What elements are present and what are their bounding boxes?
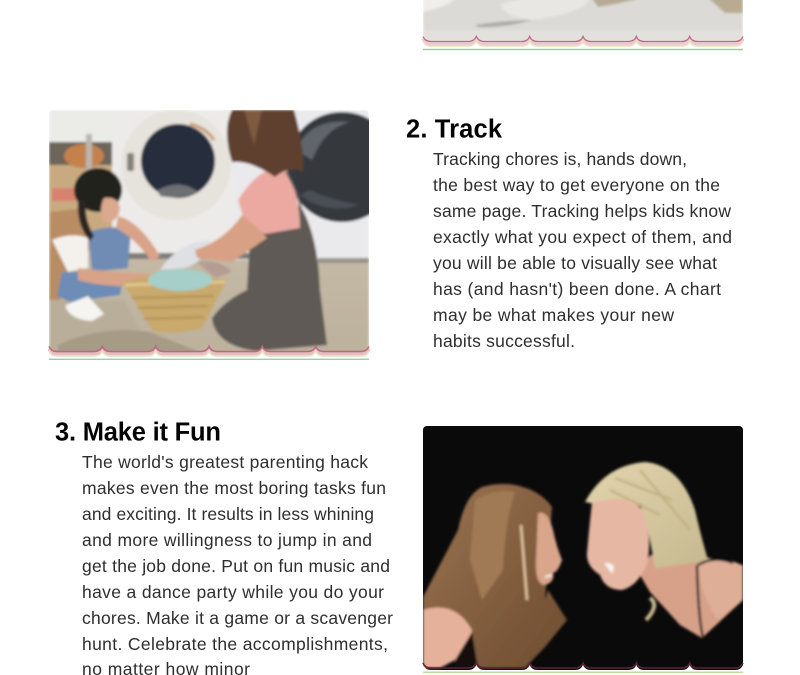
- photo: bedding on a bright floor, cropped at the top: [422, 0, 744, 50]
- text block: Track description: you will be able to visually see what: [433, 253, 717, 273]
- figure: girl: [49, 168, 160, 321]
- text block: Make it Fun description: hunt. Celebrate the accomplishments,: [82, 634, 388, 654]
- text block: Track description: may be what makes your new: [433, 305, 674, 325]
- photo edge: scalloped trim: [49, 346, 369, 370]
- photo: mother and daughter laughing face to face: [423, 426, 743, 675]
- text block: Make it Fun description: and more willingness to jump in and: [82, 530, 372, 550]
- photo: mother and daughter sorting laundry: [48, 110, 370, 360]
- photo edge: scalloped trim: [423, 663, 743, 675]
- figure: woman: [195, 110, 327, 351]
- left shelf and boxes: [49, 110, 113, 142]
- text block: Track description: habits successful.: [433, 331, 575, 351]
- text block: Make it Fun description: [82, 452, 393, 675]
- text block: Make it Fun description: and exciting. It results in less whining: [82, 504, 374, 524]
- text block: Track description: exactly what you expect of them, and: [433, 227, 732, 247]
- figure: laundry basket: [123, 240, 232, 332]
- text block: Make it Fun description: chores. Make it a game or a scavenger: [82, 608, 393, 628]
- floor shading: [49, 300, 150, 352]
- text block: Track description: [433, 149, 732, 351]
- text block: Track description: Tracking chores is, hands down,: [433, 149, 687, 169]
- text block: Make it Fun description: The world's greatest parenting hack: [82, 452, 368, 472]
- text block: Make it Fun description: makes even the most boring tasks fun: [82, 478, 386, 498]
- photo edge: scalloped trim: [423, 36, 743, 60]
- text block: Track description: same page. Tracking helps kids know: [433, 201, 731, 221]
- text block: Make it Fun description: get the job done. Put on fun music and: [82, 556, 390, 576]
- heading: 3. Make it Fun: 3. Make it Fun: [55, 418, 221, 446]
- heading: 2. Track: 2. Track: [406, 116, 503, 144]
- text block: Make it Fun description: have a dance party while you do your: [82, 582, 384, 602]
- washer bodies: [112, 110, 237, 258]
- text block: Track description: has (and hasn't) been done. A chart: [433, 279, 721, 299]
- figure: woman with blonde hair: [585, 462, 743, 638]
- figure: girl with long brown hair: [423, 484, 567, 668]
- text block: Track description: the best way to get everyone on the: [433, 175, 720, 195]
